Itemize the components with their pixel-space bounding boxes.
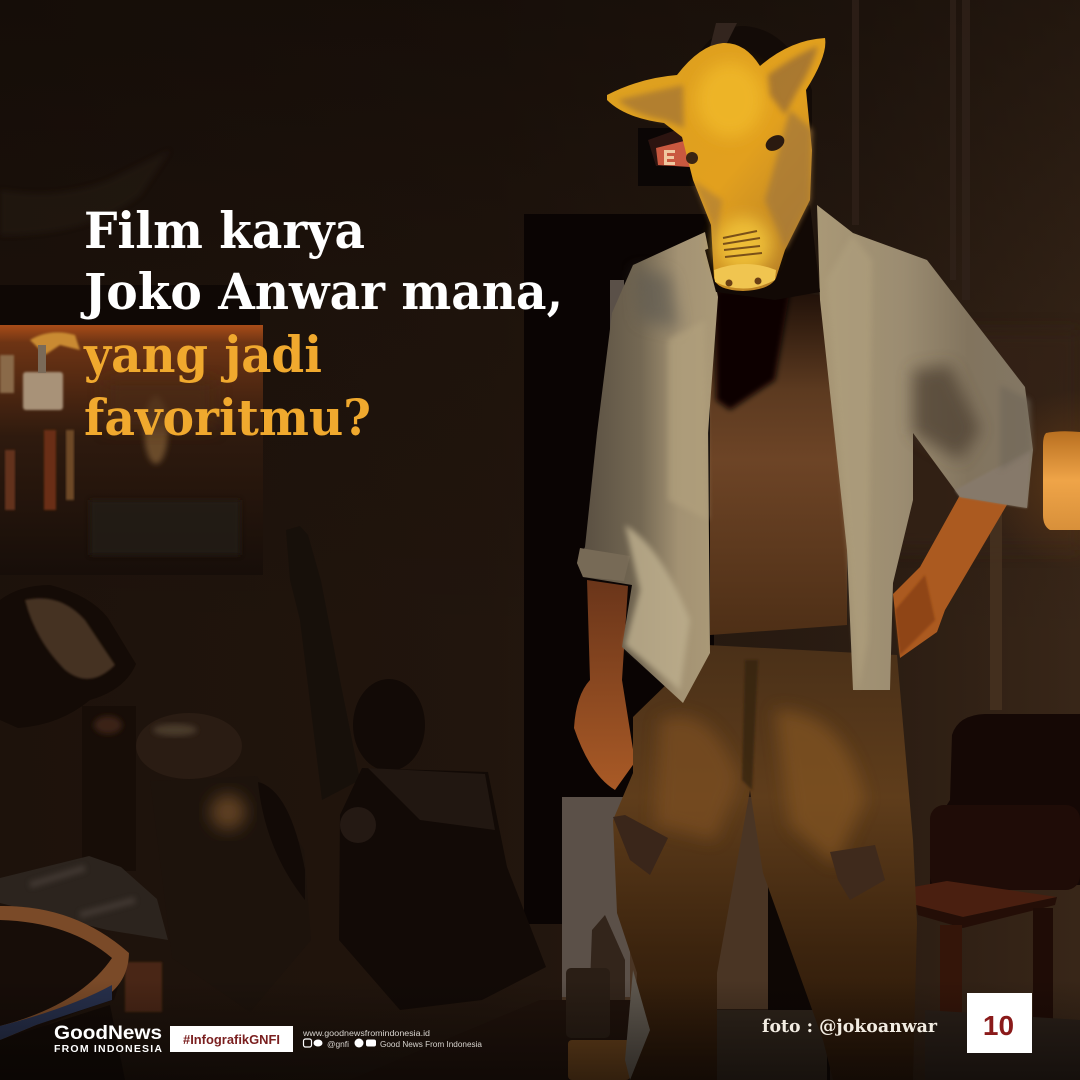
- wall lamp: [985, 390, 1080, 570]
- logo: GoodNews From Indonesia: GoodNews: [54, 1022, 162, 1044]
- painting on left wall: [0, 325, 263, 575]
- title line 2: Joko Anwar mana,: [80, 262, 563, 321]
- floor: [350, 968, 1080, 1080]
- dark doorway: [524, 214, 714, 924]
- pale box behind legs: [562, 797, 830, 1080]
- trousers: [613, 645, 917, 1080]
- hashtag badge: #InfografikGNFI: [183, 1033, 280, 1047]
- neck shadow: [705, 205, 820, 300]
- t-shirt: [710, 285, 847, 635]
- website and social links: @gnfi: [327, 1040, 349, 1049]
- icon: facebook: [354, 1038, 364, 1048]
- hashtag badge: [170, 1026, 293, 1052]
- icon: youtube: [366, 1040, 376, 1046]
- title line 3 highlighted: yang jadi: [83, 325, 322, 384]
- couch: [930, 714, 1080, 890]
- website and social links: Good News From Indonesia: [380, 1040, 483, 1049]
- shirt right panel: [817, 205, 1033, 690]
- website and social links: [302, 1029, 483, 1049]
- bottom shadow: [0, 980, 1080, 1080]
- logo: GoodNews From Indonesia: FROM INDONESIA: [54, 1043, 162, 1055]
- stool: [913, 881, 1057, 1080]
- left arm: [574, 580, 635, 790]
- title line 1: Film karya: [84, 201, 365, 260]
- logo: GoodNews From Indonesia: [54, 1022, 162, 1055]
- title: [80, 201, 563, 447]
- icon: yellow pig mask: [607, 38, 825, 291]
- person: [574, 23, 1033, 1080]
- right arm: [893, 495, 1008, 658]
- barrel foreground: [0, 906, 162, 1080]
- page number: 10: [983, 1010, 1014, 1041]
- photo credit: foto : @jokoanwar: [762, 1016, 937, 1037]
- statue: figure with raised head: [0, 585, 311, 1012]
- title line 4 highlighted: favoritmu?: [84, 388, 371, 447]
- shirt left panel: [577, 232, 718, 703]
- icon: instagram: [304, 1039, 312, 1047]
- page number: [967, 993, 1032, 1053]
- hair: [690, 23, 812, 130]
- website and social links: www.goodnewsfromindonesia.id: [302, 1029, 430, 1038]
- wall pipes: [852, 0, 1002, 710]
- exit sign: [638, 125, 700, 186]
- icon: twitter: [314, 1040, 322, 1046]
- statue: reclining figure with raised arm: [286, 526, 546, 1010]
